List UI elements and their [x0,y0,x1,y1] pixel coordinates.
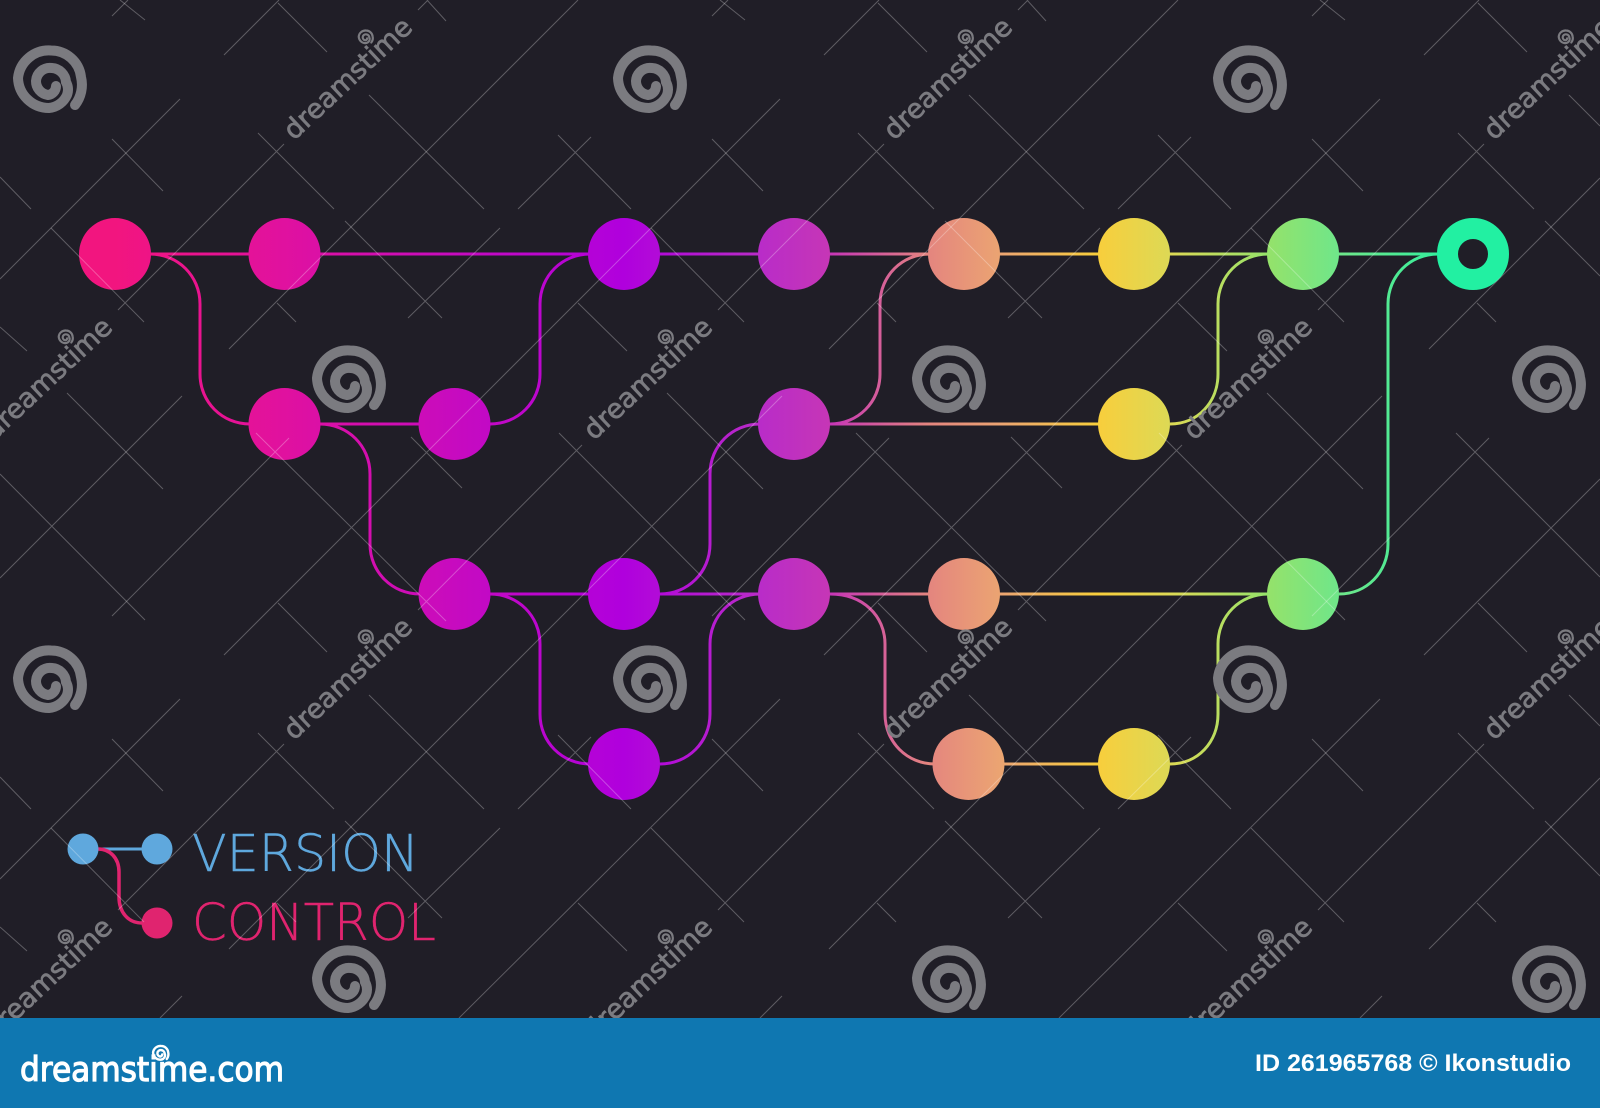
footer banner [0,1018,1600,1108]
watermark wordmarks: dreamstime [578,312,719,446]
legend icon [68,834,172,938]
connector lines [115,254,1473,764]
legend title: version: VERSION [192,825,419,884]
legend title: control: CONTROL [192,894,436,953]
watermark wordmarks: dreamstime [278,12,419,146]
watermark wordmarks: dreamstime [278,612,419,746]
watermark small spirals [59,30,1573,943]
image id and credit: ID 261965768 © Ikonstudio [1255,1050,1571,1077]
watermark wordmarks: dreamstime [1178,312,1319,446]
watermark wordmarks: dreamstime [878,612,1019,746]
branch diagram [79,218,1498,800]
final ring node [1448,228,1498,280]
watermark wordmarks: dreamstime [878,12,1019,146]
commit nodes [79,218,1339,800]
watermark wordmarks: dreamstime [578,912,719,1046]
logo spiral [153,1046,168,1060]
watermark wordmarks: dreamstime [1178,912,1319,1046]
legend [68,825,436,953]
logo wordmark: dreamstime.com [20,1050,284,1090]
